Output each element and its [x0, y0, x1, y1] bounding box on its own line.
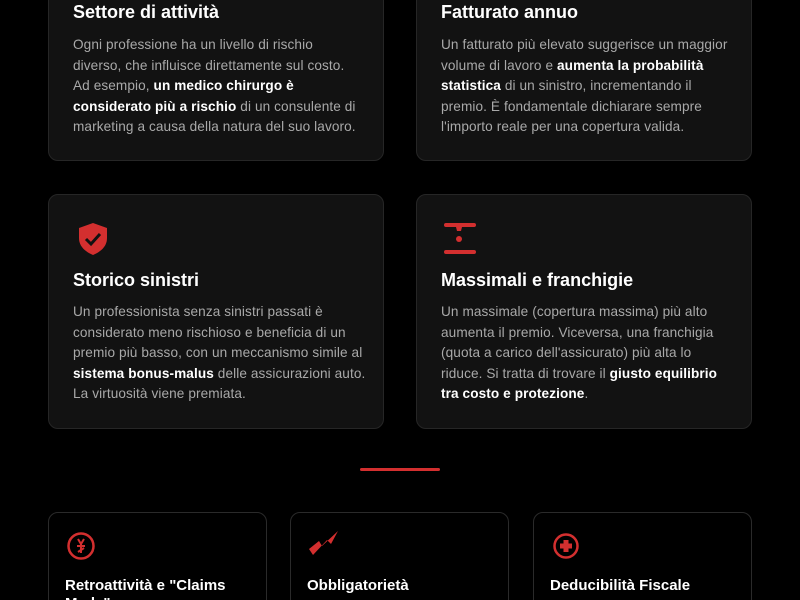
text: Un fatturato più elevato suggerisce un maggior	[441, 37, 727, 52]
card: storico sinistri	[48, 194, 384, 429]
heading: Fatturato annuo	[441, 2, 578, 22]
divider accent	[360, 468, 440, 471]
card: retroattivita	[48, 512, 267, 600]
icon: plus circle	[553, 533, 579, 559]
icon: limits	[444, 223, 476, 254]
icon: shield check	[79, 223, 107, 255]
text	[73, 304, 365, 401]
heading: Settore di attività	[73, 2, 219, 22]
text: considerato più a rischio di un consulente di	[73, 98, 356, 114]
heading: Deducibilità Fiscale	[550, 577, 690, 594]
text: premio più basso, con un meccanismo simile al	[73, 345, 362, 360]
card: obbligatorieta	[290, 512, 509, 600]
heading: Massimali e franchigie	[441, 270, 633, 290]
text: Un massimale (copertura massima) più alto	[441, 304, 707, 319]
card: settore di attivita	[48, 0, 384, 161]
heading: Storico sinistri	[73, 270, 199, 290]
text: considerato meno rischioso e beneficia di un	[73, 324, 346, 340]
text: sistema bonus-malus delle assicurazioni auto.	[73, 366, 365, 380]
card: deducibilita	[533, 512, 752, 600]
text: riduce. Si tratta di trovare il giusto equilibrio	[441, 366, 717, 380]
text	[441, 37, 728, 134]
text: tra costo e protezione.	[441, 386, 588, 401]
card: massimali e franchigie	[416, 194, 752, 429]
text: l'importo reale per una copertura valida.	[441, 119, 684, 134]
text: aumenta il premio. Viceversa, una franchigia	[441, 324, 713, 340]
heading: Obbligatorietà	[307, 577, 409, 594]
text: La virtuosità viene premiata.	[73, 386, 246, 401]
text: volume di lavoro e aumenta la probabilità	[441, 58, 703, 72]
text: (quota a carico dell'assicurato) più alta lo	[441, 345, 691, 360]
text: Ogni professione ha un livello di rischio	[73, 37, 313, 52]
text: marketing a causa della natura del suo lavoro.	[73, 119, 356, 134]
text: Un professionista senza sinistri passati è	[73, 304, 323, 319]
text	[73, 37, 356, 134]
icon: zigzag	[309, 531, 338, 555]
text: Ad esempio, un medico chirurgo è	[73, 78, 294, 93]
text: statistica di un sinistro, incrementando il	[441, 78, 692, 93]
card: fatturato annuo	[416, 0, 752, 161]
text: diverso, che influisce direttamente sul costo.	[73, 58, 344, 72]
text: premio. È fondamentale dichiarare sempre	[441, 98, 702, 114]
icon: clock circle	[67, 532, 95, 560]
text	[441, 304, 717, 401]
